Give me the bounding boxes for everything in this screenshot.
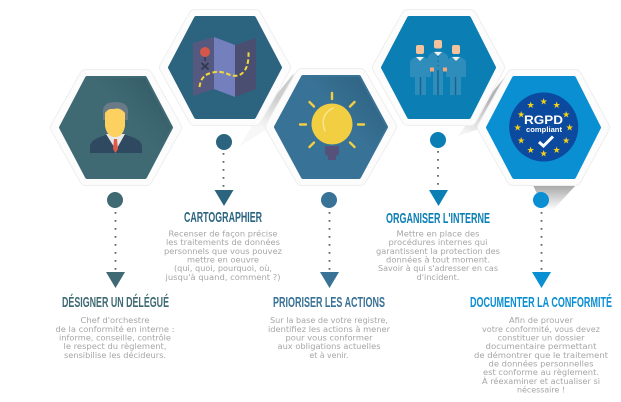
- text block 5: constituer un dossier: [498, 334, 586, 342]
- text block 5: nécessaire !: [517, 386, 565, 394]
- text block 4: Savoir à qui s'adresser en cas: [378, 264, 498, 273]
- arrow 1: [106, 272, 125, 288]
- icon: RGPD compliant badge: ★: [566, 124, 574, 134]
- text block 4: procédures internes qui: [388, 238, 488, 247]
- icon: RGPD compliant badge: ★: [517, 110, 525, 120]
- page curl shadows: [240, 73, 576, 211]
- text block 1: le respect du règlement,: [64, 342, 166, 351]
- text block 5: [474, 316, 608, 394]
- dotted line 5: [540, 212, 542, 270]
- text block 2: (qui, quoi, pourquoi, où,: [174, 264, 272, 273]
- icon: RGPD compliant badge: ★: [517, 136, 525, 146]
- heading 2: CARTOGRAPHIER: [184, 209, 262, 226]
- text block 4: données à tout moment.: [386, 256, 490, 264]
- arrow 3: [320, 272, 339, 288]
- hexagon 5: [484, 76, 603, 179]
- heading 1: DÉSIGNER UN DÉLÉGUÉ: [62, 294, 169, 311]
- icon: RGPD compliant badge: ★: [540, 150, 548, 160]
- text block 2: Recenser de façon précise: [168, 230, 278, 238]
- icon: RGPD compliant badge: RGPD: [524, 113, 563, 127]
- panel: cartographier: [164, 16, 284, 282]
- dotted line 3: [328, 212, 330, 270]
- arrow 4: [429, 190, 448, 206]
- icon: RGPD compliant badge: ★: [527, 101, 535, 111]
- panel: prioriser les actions: [268, 75, 391, 360]
- icon: RGPD compliant badge: ★: [562, 136, 570, 146]
- hexagon 3: [272, 75, 390, 179]
- dotted line 2: [222, 153, 224, 188]
- text block 1: sensibilise les décideurs.: [64, 351, 166, 360]
- text block 1: Chef d'orchestre: [80, 316, 150, 325]
- text block 3: et à venir.: [310, 351, 348, 360]
- connector dot 5: [533, 192, 549, 208]
- text block 4: d'incident.: [416, 273, 460, 282]
- text block 3: [268, 316, 391, 360]
- connector dot 1: [107, 192, 123, 208]
- icon: RGPD compliant badge: ★: [540, 98, 548, 108]
- text block 1: [56, 316, 174, 360]
- text block 2: mettre en oeuvre: [187, 256, 259, 264]
- panel: documenter la conformité: [470, 76, 612, 394]
- icon: RGPD compliant badge: ★: [562, 110, 570, 120]
- panel: organiser l'interne: [376, 16, 500, 282]
- hexagon 2: [166, 16, 284, 119]
- heading 3: PRIORISER LES ACTIONS: [273, 294, 385, 311]
- icon: RGPD compliant badge: ★: [553, 146, 561, 156]
- connector dot 2: [216, 134, 232, 150]
- text block 3: aux obligations actuelles: [278, 342, 381, 351]
- panel: designer un délégué: [56, 76, 175, 360]
- arrow 5: [532, 272, 551, 288]
- arrow 2: [214, 190, 234, 206]
- text block 3: identifiez les actions à mener: [268, 325, 391, 334]
- text block 5: de données personnelles: [488, 360, 594, 368]
- text block 5: est conforme au règlement.: [483, 368, 599, 377]
- icon: light bulb: [300, 93, 364, 160]
- text block 1: informe, conseille, contrôle: [59, 334, 171, 342]
- text block 5: documentaire permettant: [486, 342, 597, 351]
- text block 2: jusqu'à quand, comment ?): [164, 273, 281, 282]
- text block 2: personnels que vous pouvez: [164, 247, 282, 256]
- text block 5: Afin de prouver: [509, 316, 574, 325]
- text block 3: Sur la base de votre registre,: [270, 316, 388, 325]
- hexagon 1: [57, 76, 175, 179]
- icon: RGPD compliant badge: ★: [527, 146, 535, 156]
- connector dot 3: [321, 192, 337, 208]
- icon: RGPD compliant badge: [509, 92, 578, 162]
- icon: team of three: [410, 40, 466, 95]
- dotted line 1: [114, 212, 116, 270]
- text block 5: À réexaminer et actualiser si: [482, 377, 600, 386]
- text block 2: les traitements de données: [166, 238, 280, 247]
- text block 4: Mettre en place des: [396, 230, 480, 238]
- dotted line 4: [437, 151, 439, 188]
- text block 3: pour vous conformer: [286, 334, 374, 342]
- icon: map: [193, 37, 256, 97]
- icon: RGPD compliant badge: ★: [514, 124, 522, 134]
- connector dot 4: [430, 132, 446, 148]
- icon: RGPD compliant badge: compliant: [526, 127, 563, 134]
- text block 1: de la conformité en interne :: [56, 325, 174, 334]
- text block 2: [164, 230, 282, 282]
- text block 5: de démontrer que le traitement: [474, 351, 608, 360]
- text block 5: votre conformité, vous devez: [482, 325, 600, 334]
- text block 4: garantissent la protection des: [376, 247, 500, 256]
- heading 4: ORGANISER L'INTERNE: [386, 210, 490, 227]
- text block 4: [376, 230, 500, 282]
- icon: person in suit: [90, 102, 142, 153]
- icon: RGPD compliant badge: ★: [553, 101, 561, 111]
- hexagon 4: [379, 16, 498, 119]
